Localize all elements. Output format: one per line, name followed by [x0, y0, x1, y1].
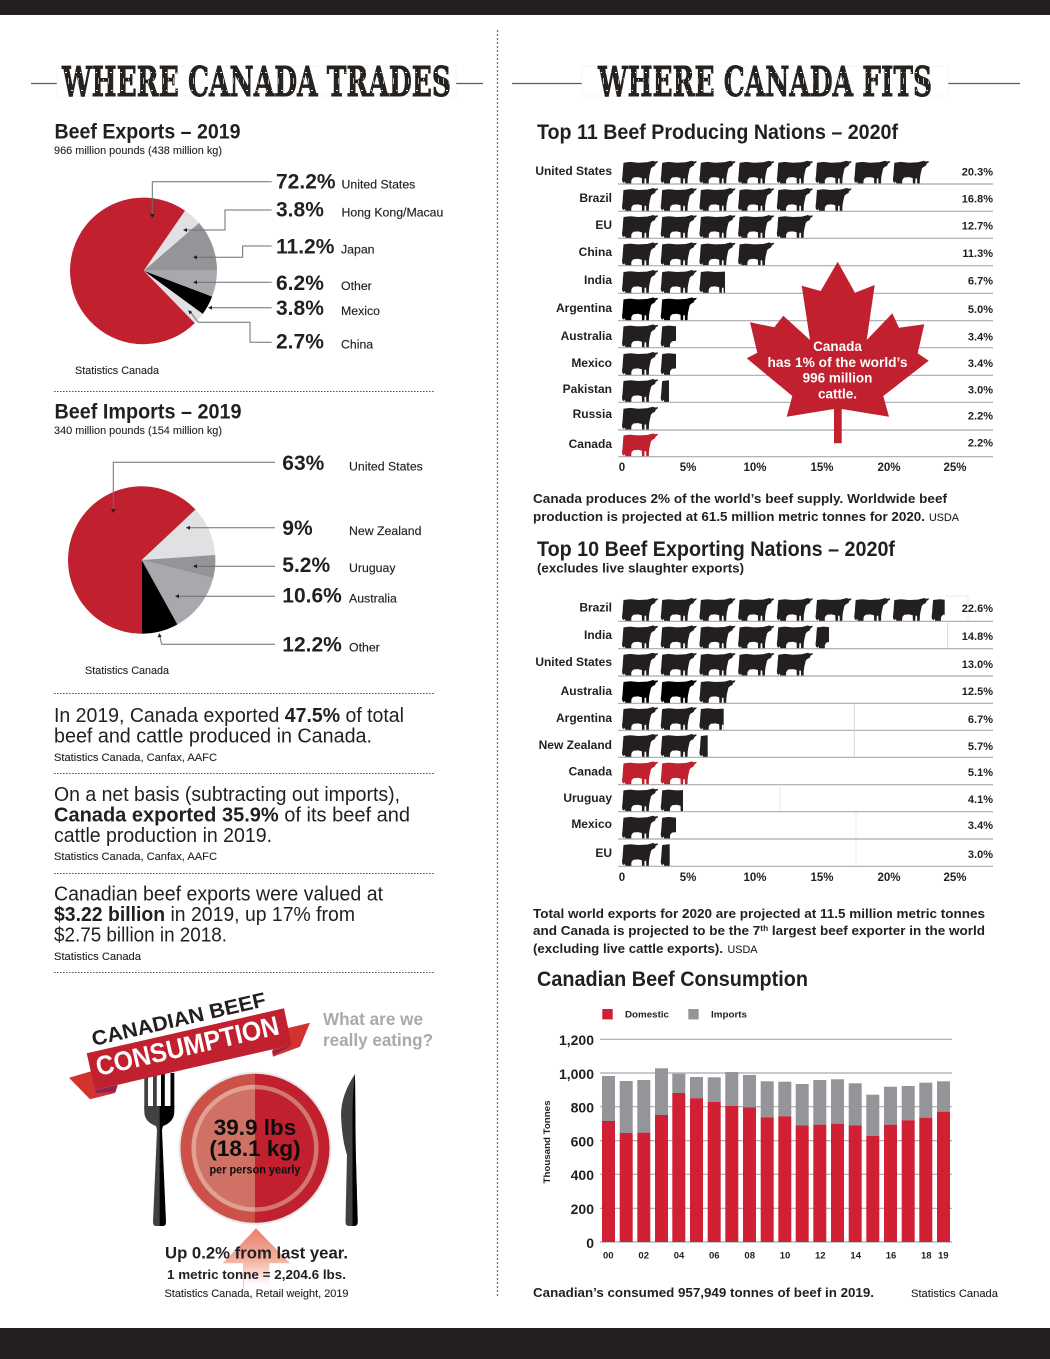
row: United States: 13.0%	[962, 659, 993, 671]
row: EU	[595, 842, 993, 867]
text block: export value: Canadian beef exports were valued at	[54, 884, 383, 906]
ribbon banner: CONSUMPTION	[93, 1011, 282, 1082]
exports data labels: Hong Kong/Macau	[342, 206, 444, 220]
row: Argentina: 5.0%	[968, 304, 993, 316]
row: Russia: Russia	[573, 407, 612, 421]
icon: fork	[144, 1073, 174, 1226]
imports data labels: Australia	[349, 592, 397, 606]
imports subtitle: 340 million pounds (154 million kg)	[54, 425, 222, 437]
row: Australia	[561, 680, 993, 703]
row: Mexico	[571, 815, 993, 840]
x axis: 0	[619, 462, 625, 474]
row: Canada: 2.2%	[968, 438, 993, 450]
exports data labels	[276, 171, 444, 354]
stacked bars	[602, 1068, 950, 1242]
exports data labels: China	[341, 338, 373, 352]
text block: share exported: beef and cattle produced in Canada.	[54, 726, 372, 748]
row: Uruguay: 4.1%	[968, 794, 993, 806]
exports data labels: United States	[342, 178, 415, 192]
chart: top 10 beef exporting nations	[535, 596, 993, 884]
exports data labels: Japan	[341, 243, 375, 257]
row: Brazil: 22.6%	[962, 603, 993, 615]
row: Australia: Australia	[561, 684, 612, 698]
row: India	[584, 624, 993, 650]
row: New Zealand: New Zealand	[539, 738, 612, 752]
x axis: 15%	[810, 462, 834, 474]
row: Australia: 12.5%	[962, 686, 993, 698]
chart title: top 10 exporters: (excludes live slaughter exports)	[537, 562, 744, 576]
y axis labels: 200	[571, 1201, 594, 1217]
imports data labels: Uruguay	[349, 561, 396, 575]
row: India: India	[584, 273, 612, 287]
x axis labels	[603, 1251, 949, 1262]
panel: beef exports	[54, 120, 444, 377]
x axis	[619, 872, 967, 884]
icon: maple leaf callout: 996 million	[803, 371, 872, 386]
row: EU	[595, 215, 993, 238]
top bar	[0, 0, 1050, 15]
row: Argentina: Argentina	[556, 711, 612, 725]
icon: maple leaf callout: has 1% of the world’s	[768, 355, 908, 370]
note: world beef supply: USDA	[929, 512, 960, 524]
plate text: 39.9 lbs	[214, 1115, 296, 1140]
row: China: 11.3%	[962, 248, 993, 260]
icon: maple leaf callout	[747, 262, 929, 443]
note: canadians consumed: Canadian’s consumed 957,949 tonnes of beef in 2019.	[533, 1285, 874, 1300]
imports source: Statistics Canada	[85, 665, 169, 677]
row: EU: EU	[595, 846, 612, 860]
row: Argentina	[556, 706, 993, 731]
y axis labels: 1,000	[559, 1066, 594, 1082]
x axis: 10%	[743, 462, 767, 474]
row: Mexico: Mexico	[571, 817, 612, 831]
plate text: per person yearly	[210, 1162, 301, 1176]
callout: what are we really eating	[323, 1009, 433, 1050]
chart title: top 10 exporters	[537, 538, 896, 576]
x axis labels: 18	[921, 1251, 932, 1262]
row: China	[579, 242, 993, 266]
ribbon banner: CANADIAN BEEF	[89, 988, 268, 1051]
row: Pakistan: Pakistan	[563, 382, 612, 396]
x axis labels: 10	[780, 1251, 790, 1262]
imports title: Beef Imports – 2019	[54, 400, 242, 424]
note: world exports	[533, 906, 985, 956]
row: Canada	[569, 433, 993, 457]
exports leader lines	[150, 182, 272, 342]
row: Canada: Canada	[569, 764, 612, 778]
imports data labels: Other	[349, 640, 380, 654]
note: world exports: (excluding live cattle exports).	[533, 941, 723, 956]
row: United States	[535, 653, 993, 676]
callout: what are we really eating: really eating?	[323, 1030, 433, 1050]
row: United States: 20.3%	[962, 166, 993, 178]
x axis: 15%	[810, 872, 834, 884]
chart title: consumption: Canadian Beef Consumption	[537, 968, 808, 991]
row: Brazil	[579, 188, 993, 211]
legend: Domestic	[625, 1010, 669, 1021]
x axis: 0	[619, 872, 625, 884]
text block: net basis: cattle production in 2019.	[54, 825, 272, 847]
y axis title: Thousand Tonnes	[542, 1100, 553, 1184]
row: India	[584, 269, 993, 294]
row: Pakistan	[563, 378, 993, 403]
exports data labels: 3.8%	[276, 297, 324, 320]
row: Mexico: Mexico	[571, 356, 612, 370]
arrow: up from last year	[223, 1228, 290, 1288]
exports data labels: 6.2%	[276, 272, 324, 295]
exports pie chart	[70, 198, 217, 344]
row: EU: 3.0%	[968, 849, 993, 861]
panel: canadian beef consumption	[69, 988, 433, 1300]
row: New Zealand: 5.7%	[968, 741, 993, 753]
x axis: 20%	[877, 872, 901, 884]
row: Canada	[569, 761, 993, 784]
x axis	[619, 462, 967, 474]
row: Canada: 5.1%	[968, 767, 993, 779]
ribbon banner	[69, 988, 310, 1099]
row: Brazil: 16.8%	[962, 194, 993, 206]
chart title: top 11 producers: Top 11 Beef Producing Nations – 2020f	[537, 121, 899, 144]
icon: knife	[341, 1074, 358, 1226]
imports data labels: United States	[349, 460, 423, 474]
imports data labels: 9%	[282, 517, 313, 540]
imports data labels: 5.2%	[282, 554, 330, 577]
x axis labels: 06	[709, 1251, 720, 1262]
row: Australia	[561, 324, 993, 348]
note: world exports: largest beef exporter in the world	[768, 923, 985, 938]
exports data labels: 72.2%	[276, 171, 336, 194]
note: world beef supply	[533, 491, 960, 524]
x axis: 5%	[680, 872, 696, 884]
imports data labels: 12.2%	[282, 633, 342, 656]
exports data labels: Other	[341, 279, 372, 293]
note: world exports: and Canada is projected to be the 7	[533, 923, 752, 938]
x axis labels: 00	[603, 1251, 614, 1262]
row: Russia	[573, 407, 993, 430]
chart title: top 10 exporters: Top 10 Beef Exporting Nations – 2020f	[537, 538, 896, 561]
plate text: (18.1 kg)	[209, 1136, 301, 1161]
imports pie chart	[68, 486, 215, 634]
consumption change text: Statistics Canada, Retail weight, 2019	[164, 1288, 348, 1300]
x axis labels: 02	[638, 1251, 649, 1262]
imports leader lines	[111, 462, 275, 644]
plate text	[209, 1115, 301, 1176]
x axis labels: 04	[674, 1251, 685, 1262]
exports data labels: 2.7%	[276, 331, 324, 354]
text block: net basis: Canada exported 35.9% of its beef and	[54, 804, 410, 826]
x axis: 10%	[743, 872, 767, 884]
exports source: Statistics Canada	[75, 365, 159, 377]
row: Russia: 2.2%	[968, 410, 993, 422]
text block: export value: Statistics Canada	[54, 951, 141, 963]
note: world exports: Total world exports for 2020 are projected at 11.5 million metric tonnes	[533, 906, 985, 921]
text block: export value: $3.22 billion in 2019, up 17% from	[54, 904, 355, 926]
bottom bar	[0, 1328, 1050, 1359]
y axis labels: 400	[571, 1167, 594, 1183]
row: India: 6.7%	[968, 276, 993, 288]
y axis labels: 800	[571, 1100, 594, 1116]
row: United States: United States	[535, 164, 612, 178]
consumption change text: 1 metric tonne = 2,204.6 lbs.	[167, 1267, 346, 1282]
heading: where canada trades: WHERE CANADA TRADES	[61, 58, 451, 106]
x axis: 25%	[943, 872, 967, 884]
icon: maple leaf callout: cattle.	[818, 386, 857, 401]
row: Pakistan: 3.0%	[968, 384, 993, 396]
chart: canadian beef consumption	[542, 1009, 952, 1262]
row: Australia: Australia	[561, 329, 612, 343]
panel: beef imports	[54, 400, 423, 677]
x axis labels: 16	[886, 1251, 896, 1262]
row: EU: 12.7%	[962, 220, 993, 232]
exports title: Beef Exports – 2019	[54, 120, 240, 144]
text block: share exported: In 2019, Canada exported 47.5% of total	[54, 705, 404, 727]
y axis labels: 0	[586, 1235, 594, 1251]
exports data labels: 11.2%	[276, 236, 335, 259]
row: Uruguay	[563, 788, 993, 812]
x axis: 25%	[943, 462, 967, 474]
row: Uruguay: Uruguay	[563, 791, 612, 805]
legend	[602, 1009, 747, 1021]
y axis labels: 600	[571, 1134, 594, 1150]
note: canadians consumed: Statistics Canada	[911, 1288, 998, 1300]
text block: share exported: Statistics Canada, Canfax, AAFC	[54, 752, 217, 764]
text block: export value: $2.75 billion in 2018.	[54, 924, 227, 946]
row: Australia: 3.4%	[968, 332, 993, 344]
row: Brazil: Brazil	[579, 600, 612, 614]
exports data labels: Mexico	[341, 304, 380, 318]
row: Argentina	[556, 297, 993, 321]
row: Mexico: 3.4%	[968, 820, 993, 832]
text block: net basis: Statistics Canada, Canfax, AAFC	[54, 851, 217, 863]
x axis: 20%	[877, 462, 901, 474]
row: China: China	[579, 245, 612, 259]
imports data labels: 10.6%	[282, 585, 342, 608]
imports data labels	[282, 452, 423, 656]
x axis labels: 19	[938, 1251, 949, 1262]
heading: where canada trades	[31, 58, 483, 106]
text block: share exported	[54, 705, 404, 764]
row: Argentina: Argentina	[556, 301, 612, 315]
row: Mexico: 3.4%	[968, 358, 993, 370]
row: Mexico	[571, 351, 993, 376]
text block: net basis: On a net basis (subtracting out imports),	[54, 784, 400, 806]
note: world exports: th	[760, 924, 768, 933]
y axis labels	[559, 1032, 594, 1251]
imports data labels: New Zealand	[349, 524, 422, 538]
row: India: 14.8%	[962, 631, 993, 643]
row: Brazil: Brazil	[579, 191, 612, 205]
exports data labels: 3.8%	[276, 199, 324, 222]
chart: top 11 beef producing nations	[535, 161, 993, 474]
note: world beef supply: production is projected at 61.5 million metric tonnes for 2020.	[533, 509, 925, 524]
row: New Zealand	[539, 733, 993, 758]
text block: export value	[54, 884, 383, 963]
text block: net basis	[54, 784, 410, 863]
row: United States	[535, 161, 993, 184]
row: Canada: Canada	[569, 437, 612, 451]
row: United States: United States	[535, 655, 612, 669]
x axis labels: 14	[850, 1251, 862, 1262]
row: Argentina: 6.7%	[968, 714, 993, 726]
exports subtitle: 966 million pounds (438 million kg)	[54, 145, 222, 157]
consumption change text	[164, 1244, 348, 1300]
callout: what are we really eating: What are we	[323, 1009, 423, 1029]
row: EU: EU	[595, 218, 612, 232]
icon: maple leaf callout: Canada	[813, 339, 862, 354]
note: world exports: USDA	[728, 944, 758, 956]
note: world beef supply: Canada produces 2% of the world’s beef supply. Worldwide beef	[533, 491, 948, 506]
row: India: India	[584, 628, 612, 642]
row: Brazil	[579, 597, 993, 622]
icon: plate	[178, 1072, 332, 1225]
x axis: 5%	[680, 462, 696, 474]
imports data labels: 63%	[282, 452, 325, 475]
x axis labels: 08	[744, 1251, 755, 1262]
legend: Imports	[711, 1010, 747, 1021]
consumption change text: Up 0.2% from last year.	[165, 1244, 348, 1262]
x axis labels: 12	[815, 1251, 826, 1262]
y axis labels: 1,200	[559, 1032, 594, 1048]
